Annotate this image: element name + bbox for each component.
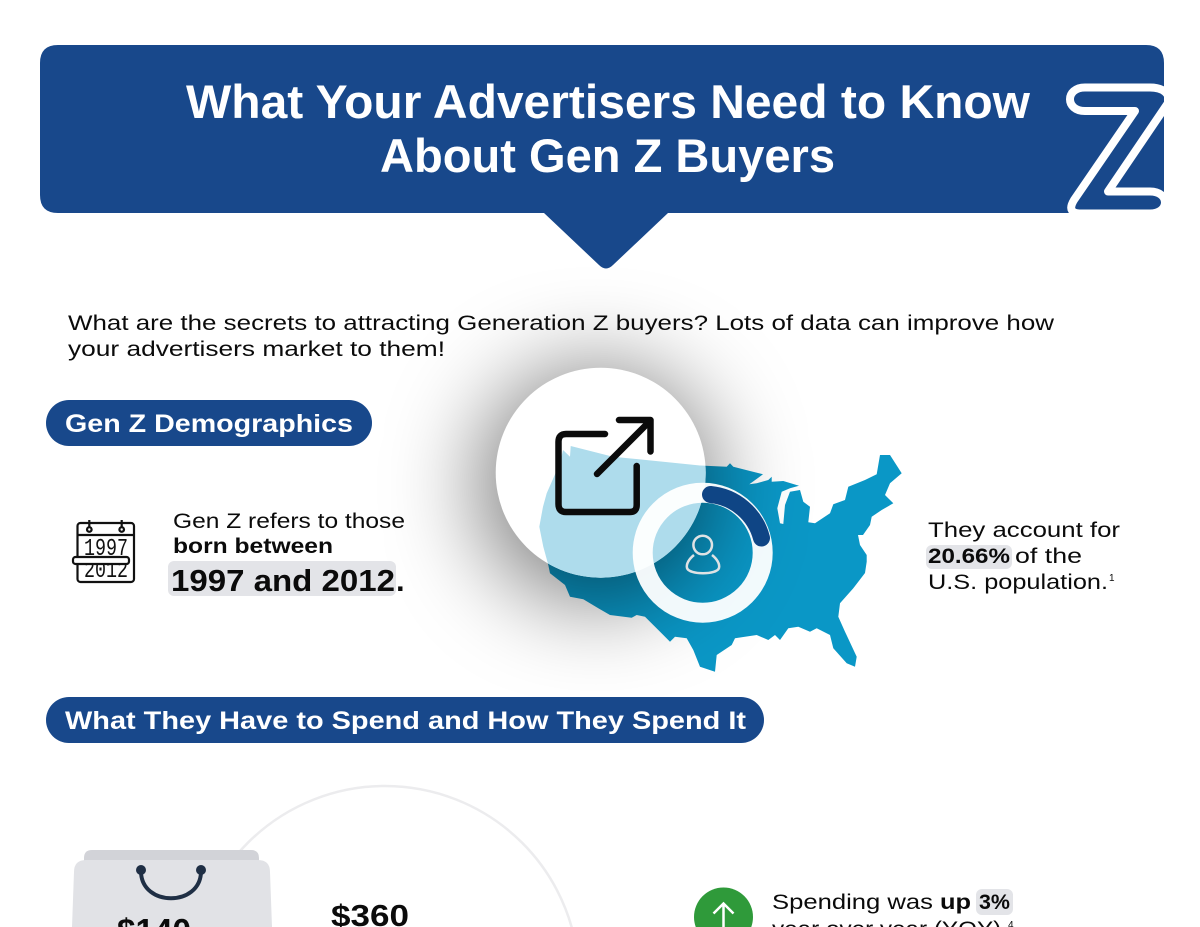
icon: green up arrow: [694, 888, 753, 927]
heading: Gen Z Demographics: [46, 400, 372, 446]
text: spending up 3%: 3%: [979, 891, 1010, 914]
text: share of U.S. population: 20.66%: [928, 545, 1010, 568]
text: share of U.S. population: They account for: [928, 519, 1120, 542]
bag back: [84, 850, 259, 862]
large circle outline: [191, 786, 579, 927]
icon: external link: [558, 420, 650, 512]
text: share of U.S. population: 1: [1109, 573, 1115, 584]
heading: Gen Z Demographics: Gen Z Demographics: [65, 410, 353, 438]
intro text: What are the secrets to attracting Generation Z buyers? Lots of data can improve how: [68, 312, 1055, 335]
icon: Z logo: [1070, 88, 1170, 214]
icon: person: [687, 536, 719, 573]
text: share of U.S. population: [926, 519, 1120, 594]
title line 1: What Your Advertisers Need to Know: [186, 75, 1030, 128]
icon: shopping bag with amount: [72, 850, 272, 927]
intro text: your advertisers market to them!: [68, 338, 445, 361]
icon: calendar 1997 to 2012: [73, 520, 134, 585]
heading: What They Have to Spend: What They Have to Spend and How They Spend It: [65, 707, 747, 735]
text: born between: [168, 510, 405, 598]
highlight: [168, 561, 396, 596]
text: born between: Gen Z refers to those: [173, 510, 405, 533]
map of the United States with circle callouts: [478, 367, 902, 672]
icon: calendar 1997 to 2012: 2012: [84, 558, 128, 585]
bag front: [72, 860, 272, 927]
heading: What They Have to Spend: [46, 697, 764, 743]
text: spending up 3%: [772, 889, 1014, 927]
soft shadow of circle: [478, 367, 714, 603]
years: 1997 and 2012: [171, 563, 395, 598]
bag handle: [136, 865, 206, 898]
progress arc: [710, 494, 762, 538]
highlight: [926, 545, 1012, 569]
icon: calendar 1997 to 2012: 1997: [84, 536, 128, 563]
title banner: [40, 45, 1170, 268]
banner background: [40, 45, 1164, 268]
ring: [643, 493, 763, 613]
text: born between: born between: [173, 535, 333, 558]
text: share of U.S. population: of the: [1015, 545, 1082, 568]
light map in circle: [539, 446, 706, 578]
title line 2: About Gen Z Buyers: [380, 129, 835, 182]
text: born between: .: [396, 563, 405, 598]
map: [539, 446, 902, 672]
text: spending up 3%: Spending was: [772, 891, 933, 914]
white circle: [496, 368, 706, 578]
text: spending up 3%: up: [940, 891, 971, 914]
highlight: [976, 889, 1013, 915]
text: share of U.S. population: U.S. population.: [928, 571, 1108, 594]
intro text: [68, 312, 1055, 361]
